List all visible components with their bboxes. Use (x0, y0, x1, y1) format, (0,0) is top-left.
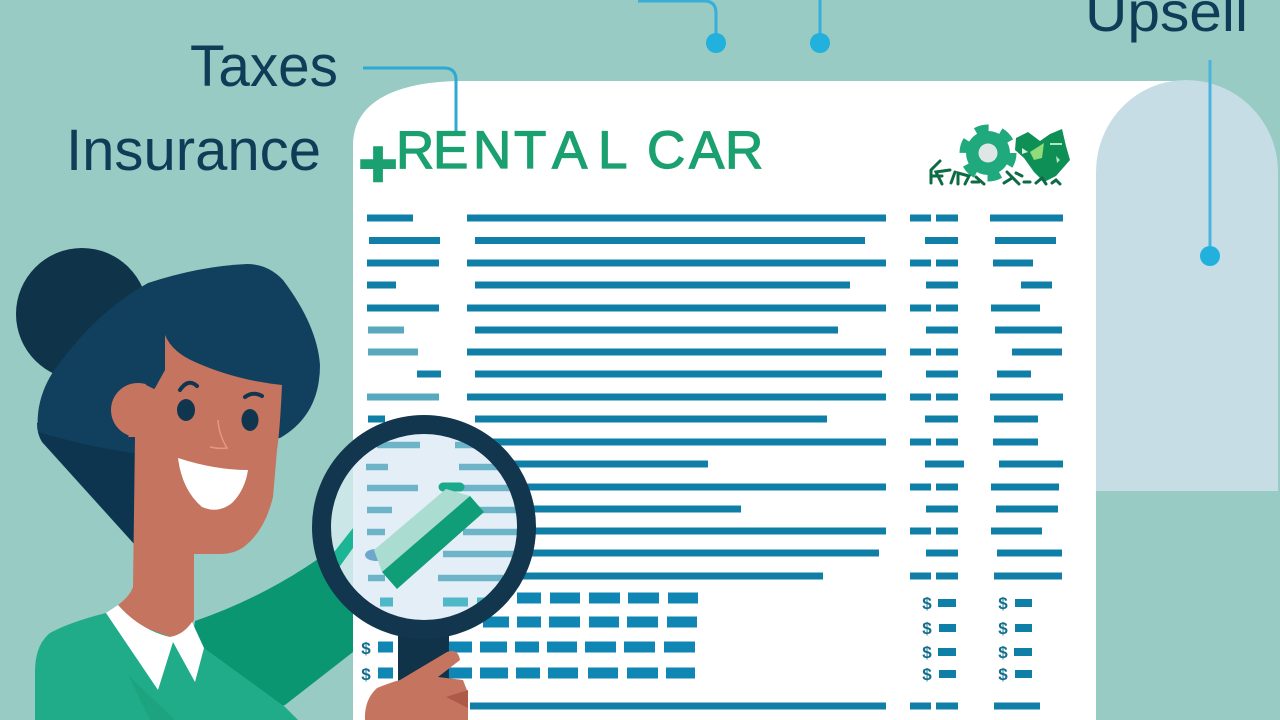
smile (178, 458, 248, 510)
hair wedge at ear (130, 300, 165, 389)
hand (365, 651, 468, 720)
lens view (331, 434, 517, 620)
label: Insurance: Insurance (66, 118, 321, 183)
icon: left eye (177, 399, 195, 421)
lens ring (322, 424, 526, 630)
connector: top middle callout with dot (810, 0, 830, 53)
table: faded left cells (367, 330, 439, 397)
table: short cell grid (378, 598, 698, 673)
invoice title (359, 121, 763, 200)
shirt collar (106, 605, 204, 690)
table: dollar amounts: $ (361, 639, 371, 658)
hair (38, 264, 320, 455)
table: dollar amounts: $ (922, 643, 932, 662)
handle (398, 630, 449, 690)
nose (210, 420, 227, 448)
table: quantity column (910, 218, 964, 706)
panel: invoice paper (353, 81, 1180, 720)
table: dollar amounts: $ (361, 665, 371, 684)
icon: hair bun (16, 248, 148, 380)
table: dollar amounts: $ (922, 665, 932, 684)
connector: Upsell line with dot (1200, 60, 1220, 266)
table: description rows (367, 218, 886, 706)
hair lower shadow (37, 420, 135, 545)
panel: curled page corner (1096, 80, 1278, 491)
ear (111, 383, 165, 437)
sweater body (35, 613, 298, 720)
connector: top left callout with dot (638, 1, 726, 53)
eyebrows (180, 383, 262, 397)
table: dollar amounts: $ (998, 665, 1008, 684)
table: dollar amounts: $ (998, 643, 1008, 662)
table: dollar amounts (361, 594, 1032, 684)
neck and face (118, 335, 282, 637)
invoice title: + (359, 126, 397, 200)
icon: gears logo (931, 129, 1070, 184)
table: dollar amounts: $ (922, 594, 932, 613)
sweater fold (128, 675, 175, 720)
sweater arm (180, 533, 353, 720)
table: dollar amounts: $ (998, 619, 1008, 638)
connector: Taxes line (363, 68, 456, 136)
invoice title: RENTALCAR (396, 121, 763, 180)
table: dollar amounts: $ (998, 594, 1008, 613)
table: amount column (990, 218, 1063, 706)
person (16, 248, 353, 720)
label: Taxes: Taxes (190, 34, 338, 99)
icon: right eye (242, 409, 258, 431)
magnifying glass (320, 424, 530, 690)
table: dollar amounts: $ (922, 619, 932, 638)
